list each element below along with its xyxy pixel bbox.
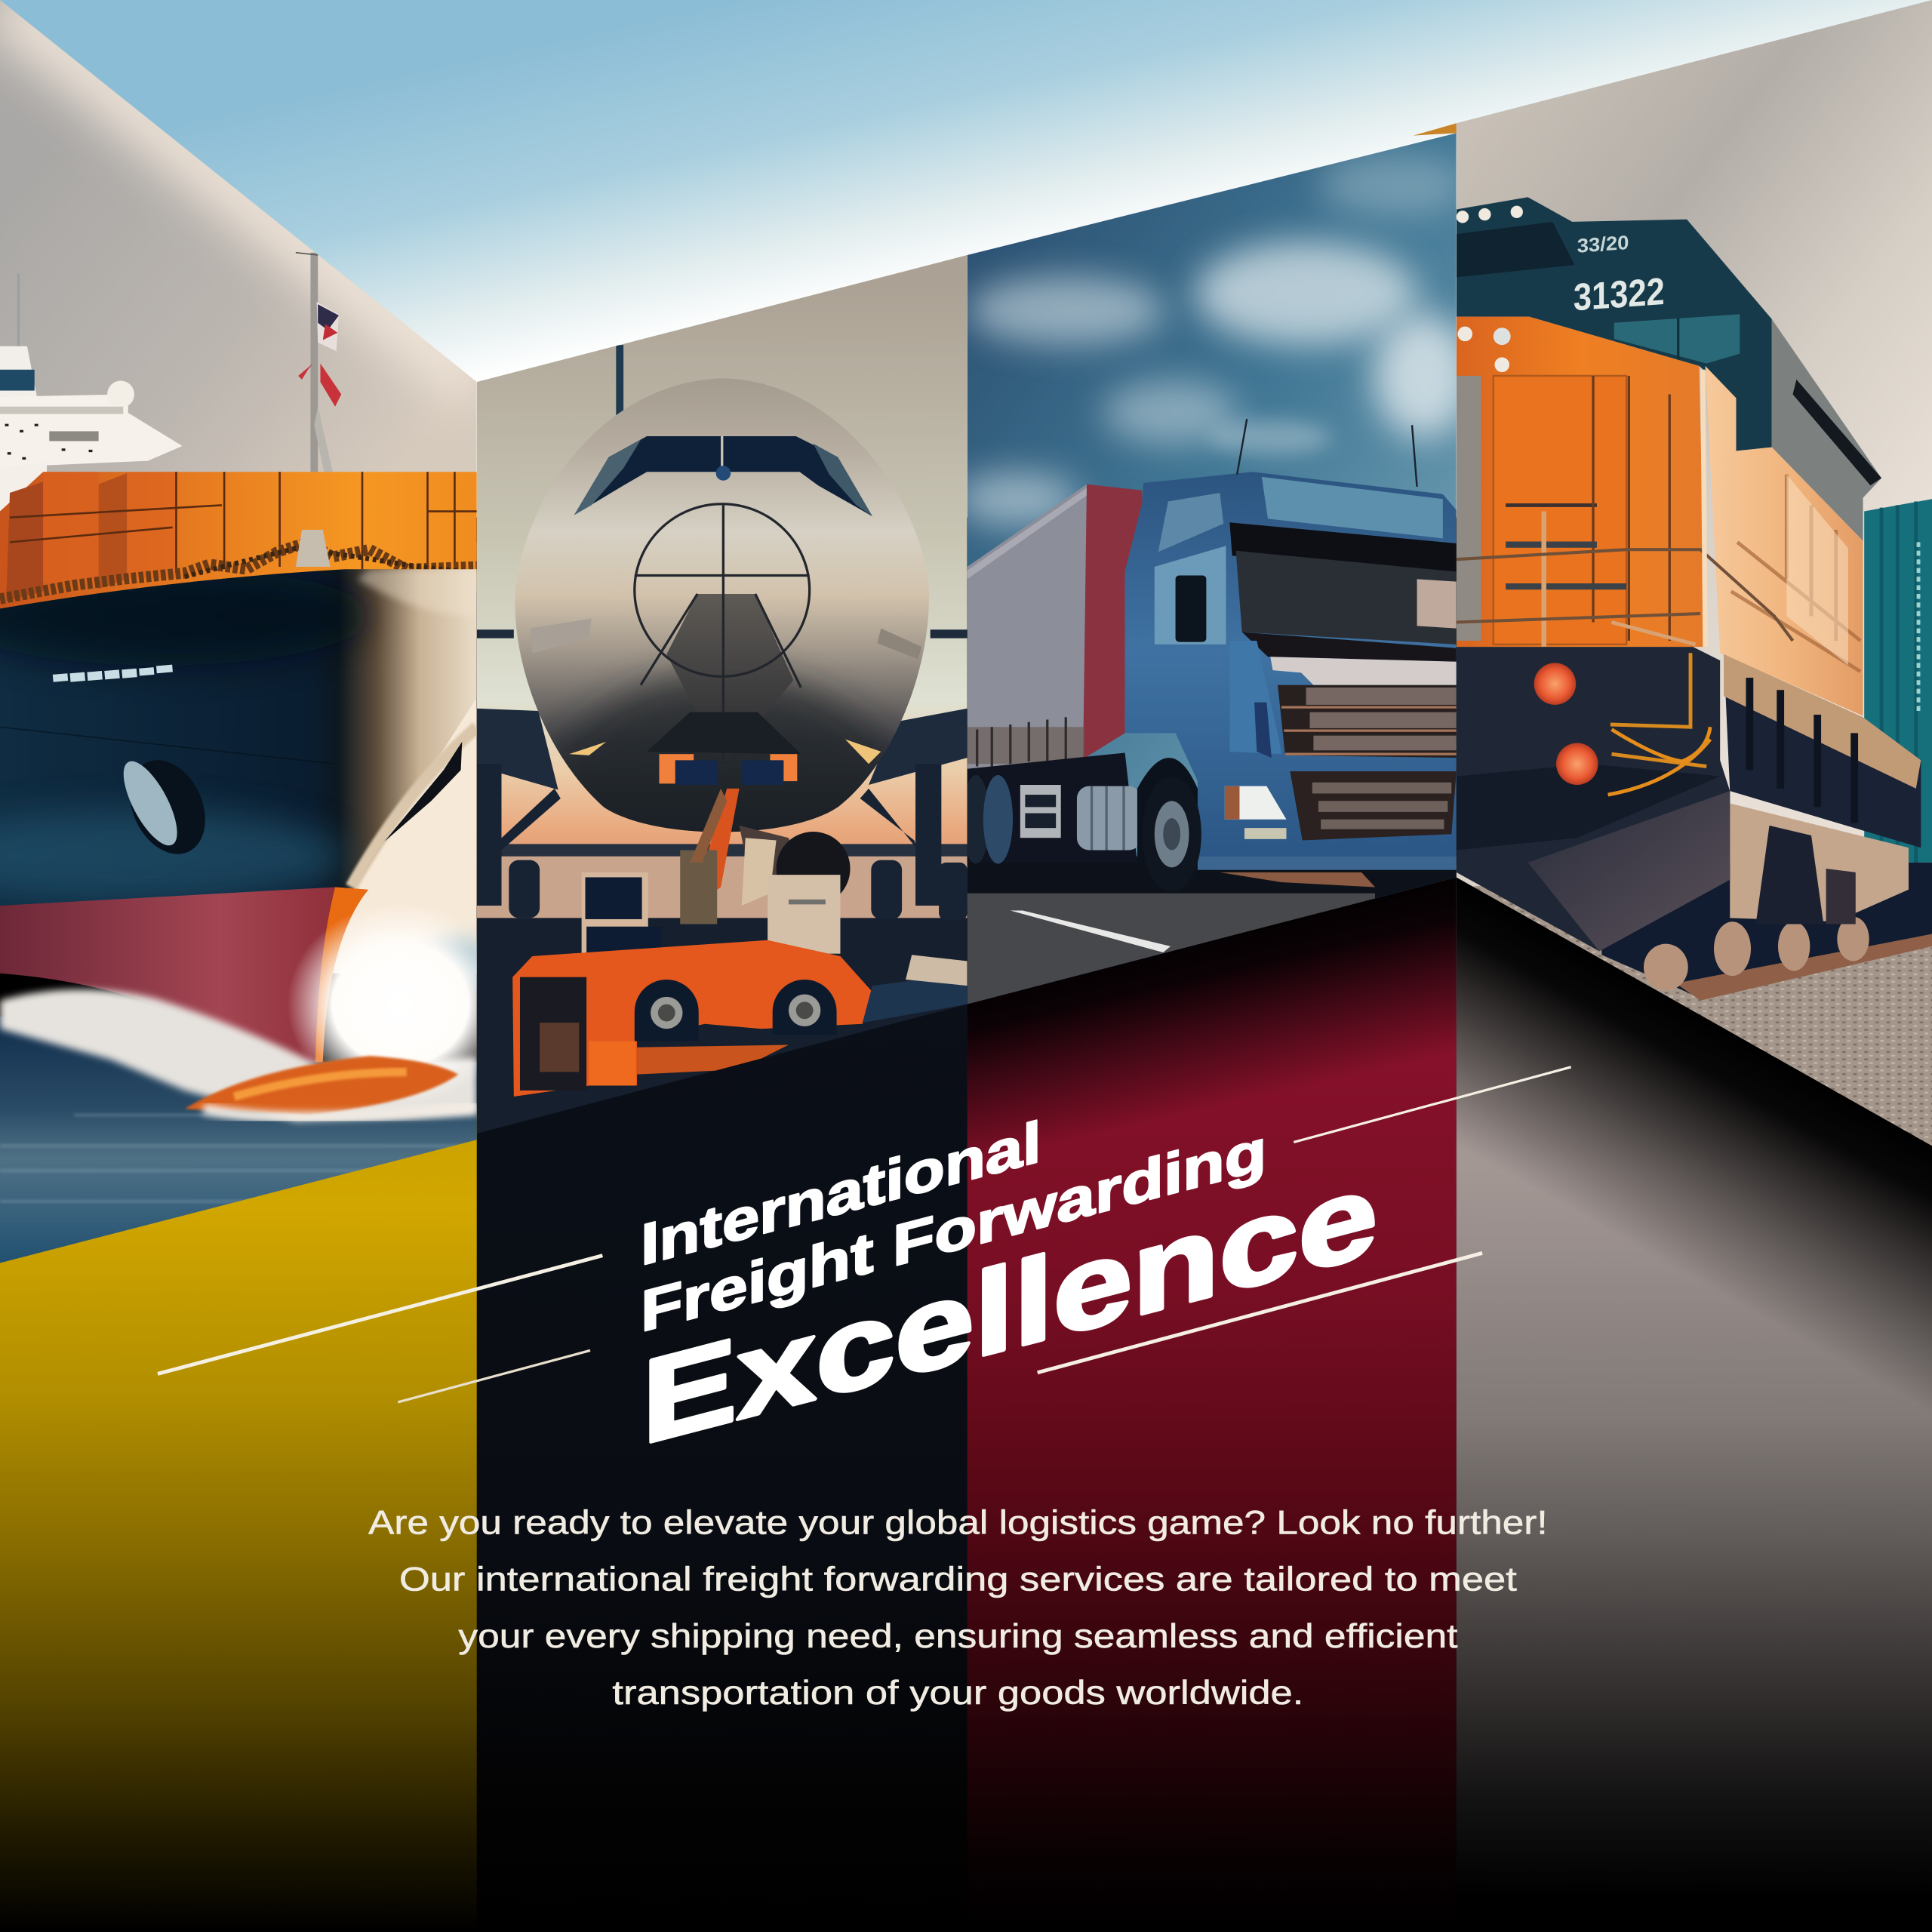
shipping containers — [0, 472, 477, 610]
grey engine hood — [1772, 319, 1881, 541]
trailer — [968, 485, 1142, 769]
marker lamps — [1534, 663, 1598, 785]
roof lights and number: 33/20 — [1577, 231, 1629, 257]
colour band: yellow — [0, 1109, 477, 1932]
under-frame — [1724, 654, 1921, 848]
landing gear — [477, 764, 968, 921]
rails — [1675, 934, 1932, 1001]
body text: Are you ready to elevate your global logistics game? Look no further! — [368, 1505, 1548, 1542]
orange front — [1457, 317, 1706, 647]
decorative rule: upper left — [158, 1256, 602, 1374]
hull stripe windows — [53, 665, 173, 682]
distant terminal — [477, 857, 968, 921]
front details — [1457, 327, 1793, 653]
cockpit windows — [574, 436, 872, 516]
colour band: crimson — [968, 863, 1457, 1932]
front wheel — [1137, 758, 1201, 892]
body text — [368, 1505, 1548, 1712]
water — [0, 1017, 477, 1269]
roof lights and number: 31322 — [1574, 269, 1665, 318]
body text: Our international freight forwarding services are tailored to meet — [399, 1561, 1517, 1598]
headline line: Excellence: Excellence — [642, 1146, 1377, 1469]
lower bumper and plow — [1457, 647, 1730, 951]
colour band: grey — [1457, 863, 1932, 1932]
ground crew and gear — [659, 754, 851, 924]
lower red hull — [0, 888, 368, 1062]
cab detail — [1155, 419, 1457, 870]
bow slit — [384, 742, 462, 841]
ship mast and flags — [296, 252, 341, 472]
dark lower track area — [1599, 863, 1932, 998]
roof lights and number — [1457, 206, 1740, 364]
panel: locomotive — [1457, 0, 1932, 1158]
headline line: International: International — [641, 1109, 1041, 1278]
body text: your every shipping need, ensuring seamless and efficient — [458, 1618, 1457, 1655]
truck chassis and rear wheels — [962, 753, 1141, 863]
bow waves — [0, 903, 514, 1121]
ship hull — [0, 567, 477, 906]
truck cab — [1125, 472, 1457, 870]
orange sliver — [1414, 123, 1457, 136]
background sky — [0, 0, 1932, 518]
panel: airplane — [477, 247, 968, 1140]
headline — [641, 1109, 1377, 1469]
locomotive dark cab and roof — [1457, 197, 1772, 451]
decorative rule: lower right — [1038, 1253, 1482, 1373]
headline line: Freight Forwarding: Freight Forwarding — [641, 1116, 1266, 1345]
panel: truck — [955, 123, 1472, 1017]
decorative rule: lower left — [398, 1350, 590, 1402]
bogies — [1730, 803, 1909, 921]
clouds — [955, 152, 1472, 526]
fuselage nose — [515, 378, 929, 851]
ship superstructure — [0, 273, 183, 518]
decorative rule: upper right — [1294, 1067, 1571, 1142]
colour band: navy — [477, 986, 968, 1932]
gravel — [1457, 863, 1932, 1158]
body text: transportation of your goods worldwide. — [612, 1675, 1303, 1712]
wheels — [1644, 917, 1869, 991]
side sensors — [530, 619, 921, 764]
wings — [477, 629, 968, 790]
nose cone — [635, 504, 810, 764]
panel: container ship — [0, 0, 514, 1269]
baggage tug — [512, 872, 968, 1097]
teal container — [1864, 499, 1932, 863]
road — [968, 857, 1457, 1017]
apron ground — [477, 918, 968, 1140]
anchor — [124, 760, 205, 854]
radome underside — [647, 712, 801, 754]
peach long hood — [1706, 366, 1863, 716]
